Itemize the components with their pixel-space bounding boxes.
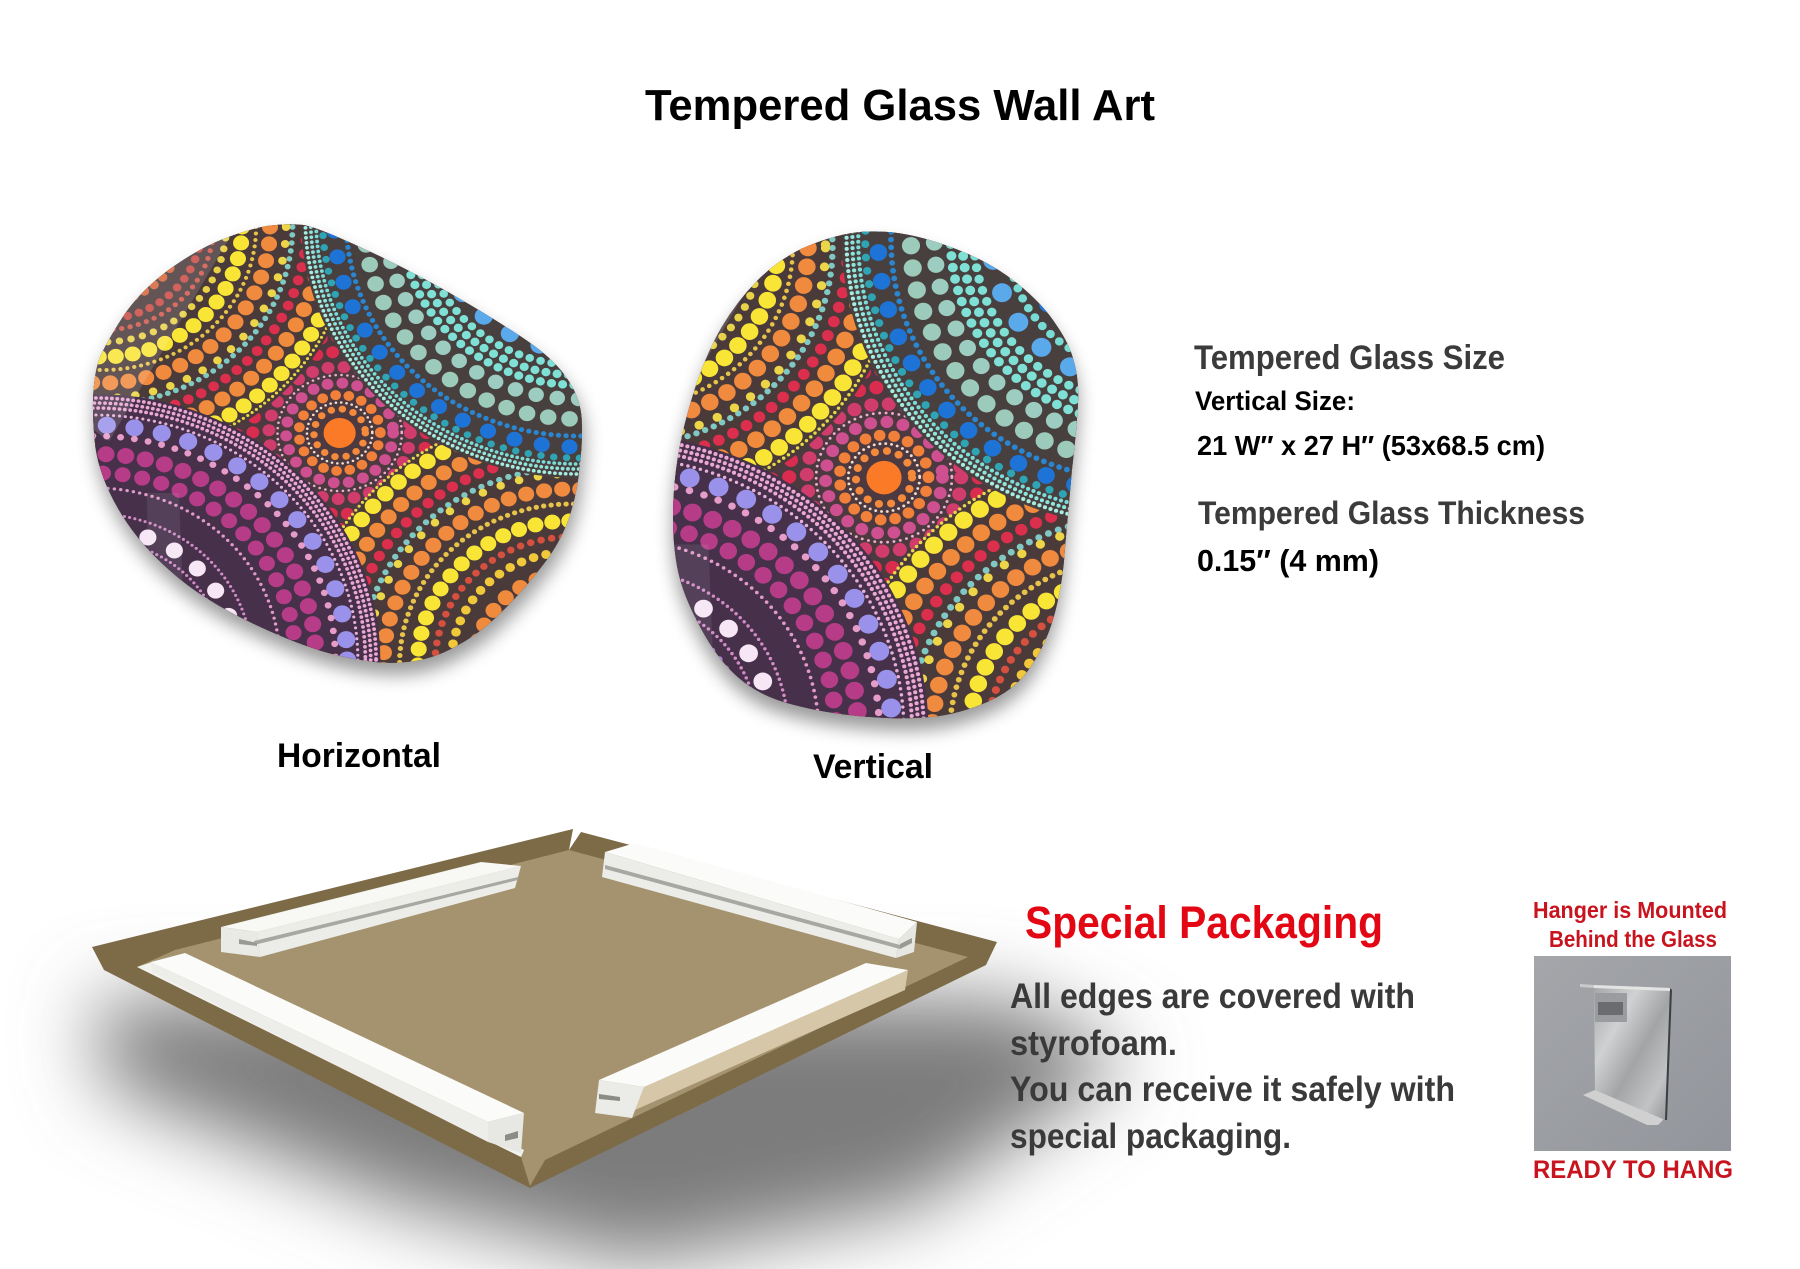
description: All edges are covered with: [1010, 977, 1415, 1016]
packaging text block: [1010, 897, 1455, 1156]
dot mandala artwork, vertical: [673, 231, 1078, 718]
hanger caption top: Behind the Glass: [1549, 926, 1717, 952]
label: vertical: Vertical: [813, 748, 933, 786]
hanger caption top: Hanger is Mounted: [1533, 897, 1727, 923]
vertical size label: Vertical Size:: [1195, 386, 1355, 416]
thickness value: 0.15″ (4 mm): [1197, 543, 1379, 578]
description: special packaging.: [1010, 1117, 1291, 1156]
vertical glass panel: [662, 231, 1090, 742]
description: styrofoam.: [1010, 1024, 1177, 1063]
dot mandala artwork, horizontal: [92, 224, 582, 663]
label: horizontal: Horizontal: [277, 737, 441, 775]
foam bar: top-left: [221, 862, 521, 957]
packaging tray illustration: [92, 829, 997, 1188]
description: [1010, 977, 1455, 1156]
cardboard walls: [92, 829, 997, 1188]
packaging shadow: [95, 1000, 1130, 1262]
description: You can receive it safely with: [1010, 1070, 1455, 1109]
heading: glass thickness: Tempered Glass Thickness: [1198, 495, 1585, 531]
hanger caption top: [1533, 897, 1727, 952]
cardboard floor: [137, 850, 968, 1186]
panel shadow: [95, 236, 584, 675]
foam bar: top-right: [602, 843, 917, 958]
title: Tempered Glass Wall Art: [645, 81, 1155, 130]
white edge slit: [137, 962, 524, 1157]
foam bar: bottom-left: [151, 953, 524, 1153]
specifications text block: [1194, 339, 1585, 578]
heading: glass size: Tempered Glass Size: [1194, 339, 1505, 377]
ready to hang caption: READY TO HANG: [1533, 1156, 1733, 1184]
hanger callout: [1533, 897, 1733, 1184]
heading: special packaging: Special Packaging: [1025, 897, 1383, 948]
size value: 21 W″ x 27 H″ (53x68.5 cm): [1197, 430, 1545, 461]
hanger photo: [1534, 956, 1731, 1151]
foam bar: bottom-right: [595, 963, 908, 1118]
panel shadow: [673, 243, 1078, 730]
horizontal glass panel: [82, 224, 596, 686]
